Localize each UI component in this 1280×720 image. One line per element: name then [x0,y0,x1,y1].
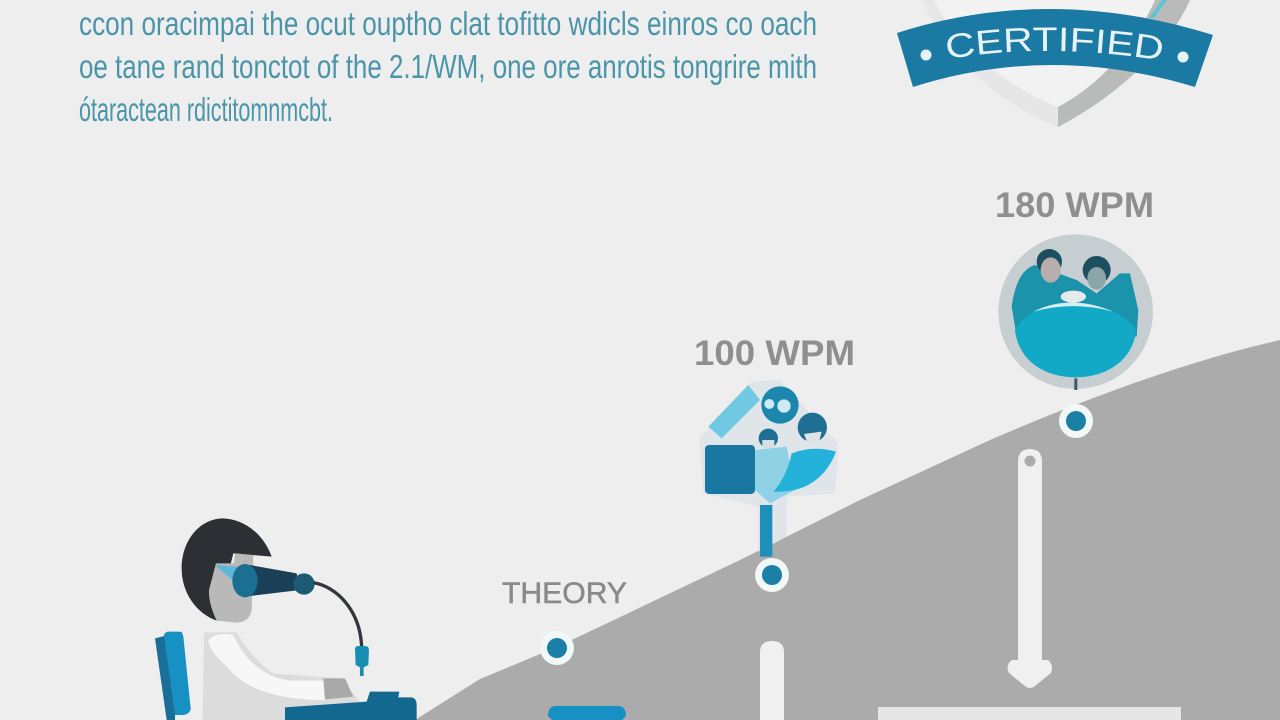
globe [761,386,799,424]
shield body [923,0,1175,127]
badge: certified shield [897,0,1213,127]
label: 180 WPM: 180 WPM [995,186,1154,225]
left head [1037,249,1062,274]
illustration: person with headset [155,518,417,720]
sleeve [708,385,760,438]
shield left edge [923,0,1058,127]
icon backing [699,380,838,552]
text block: intro paragraph: oe tane rand tonctot of the 2.1/WM, one ore anrotis tongrire mith [79,48,817,85]
hand [323,678,353,699]
text block: intro paragraph: ótaractean rdictitomnmcbt. [79,91,333,128]
connector [1074,378,1077,390]
main cyan bowl [1015,302,1136,377]
badge: certified shield: CERTIFIED [947,28,1162,58]
arrow: 180 WPM down arrow [1008,449,1052,688]
desk device [285,692,417,720]
plug [355,646,369,676]
goggle strap [215,565,237,582]
chair back [155,632,191,720]
element: theory base block [548,706,626,720]
hair [182,518,272,621]
goggle lens [232,564,258,597]
text block: intro paragraph [79,5,817,128]
icon: 100 WPM group [699,380,838,557]
bowl highlight [1033,302,1113,312]
label: 100 WPM: 100 WPM [694,334,855,373]
element: bottom result panel [878,707,1181,720]
ribbon dots [920,50,1188,62]
laptop panel [705,445,755,494]
marker: 180 WPM dot [1059,404,1093,438]
torso [203,632,360,720]
marker: theory dot [540,631,574,665]
head right [798,413,827,442]
arrow: 100 WPM stem [760,641,784,720]
ribbon [897,9,1213,87]
body left [755,447,795,503]
shield right edge [1058,0,1190,127]
head left [759,429,778,448]
right head [1083,256,1111,284]
scope tube [250,565,300,596]
label: theory: THEORY [502,577,627,610]
shield cyan accent [1149,0,1167,18]
cable [313,583,362,647]
body right [773,449,836,492]
marker: 100 WPM dot [755,558,789,592]
text block: intro paragraph: ccon oracimpai the ocut ouptho clat tofitto wdicls einros co oach [79,5,817,42]
icon: 180 WPM circle group [998,234,1153,390]
scope end [293,573,315,595]
chart: rising grey area curve [415,340,1280,720]
arm highlight [208,634,325,700]
stand [760,505,772,557]
center hands [1061,291,1086,303]
shoulders [1012,265,1138,337]
circle backdrop [998,234,1153,389]
face [209,553,253,623]
ribbon text [947,51,1163,61]
